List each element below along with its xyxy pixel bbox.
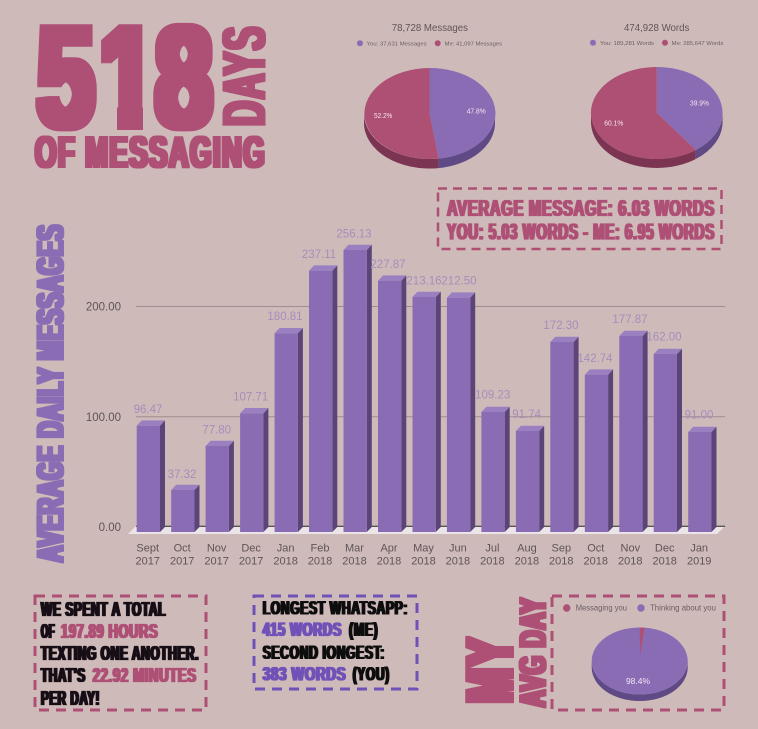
bar: Sept 2017 (137, 420, 165, 532)
callout: total hours texting: PER DAY! (41, 688, 100, 710)
bar chart: average daily messages per month (86, 228, 725, 568)
month axis labels: 2017 (239, 556, 263, 568)
pie chart: words: Me: 285,647 Words (672, 41, 724, 47)
callout: total hours texting: 197.89 HOURS (61, 621, 158, 643)
month axis labels: 2018 (273, 556, 298, 568)
title: 518 days of messaging: OF MESSAGING (35, 128, 266, 177)
bar: Jun 2018 (447, 292, 475, 532)
month axis labels: Feb (311, 542, 329, 554)
title: 518 days of messaging (34, 22, 266, 168)
month axis labels: 2018 (618, 556, 643, 568)
bar value labels: 162.00 (646, 332, 682, 344)
panel: my average day pie chart (552, 596, 724, 710)
month axis labels: 2018 (584, 556, 608, 568)
month axis labels: 2018 (480, 556, 505, 568)
bar value labels: 213.16 (406, 276, 442, 288)
callout: total hours texting: THAT'S (41, 665, 86, 687)
callout: total hours texting: TEXTING ONE ANOTHER. (41, 643, 199, 665)
bar value labels: 91.74 (512, 409, 542, 421)
bar value labels: 37.32 (168, 469, 196, 481)
callout: longest whatsapp: 383 WORDS (263, 665, 346, 686)
bar value labels: 227.87 (370, 259, 406, 271)
month axis labels: Nov (621, 542, 641, 554)
month axis labels: Oct (587, 542, 604, 554)
month axis labels (135, 542, 711, 568)
month axis labels: 2019 (687, 556, 711, 568)
callout: average message length (438, 188, 722, 249)
bar value labels: 91.00 (685, 410, 713, 422)
bar value labels: 172.30 (543, 320, 579, 332)
month axis labels: Aug (517, 542, 537, 554)
bar: Jan 2019 (688, 427, 716, 532)
month axis labels: 2018 (308, 556, 332, 568)
callout: total hours texting: WE SPENT A TOTAL (41, 599, 166, 621)
panel: my average day pie chart: Thinking about you (650, 604, 716, 613)
bar: Apr 2018 (378, 275, 406, 532)
pie chart: messages: 52.2% (374, 113, 392, 120)
month axis labels: 2017 (135, 556, 160, 568)
callout: total hours texting: OF (41, 621, 55, 643)
callout: longest whatsapp: SECOND IONGEST: (263, 643, 385, 664)
bar: Mar 2018 (344, 245, 372, 532)
month axis labels: 2018 (377, 556, 401, 568)
bar: Nov 2018 (619, 331, 648, 532)
bar: Oct 2018 (585, 369, 613, 532)
month axis labels: 2018 (342, 556, 367, 568)
month axis labels: Nov (207, 542, 227, 554)
bar: May 2018 (412, 292, 441, 532)
month axis labels: Sep (552, 542, 571, 554)
heading: my avg day: MY (453, 636, 526, 703)
month axis labels: Sept (136, 542, 159, 554)
pie chart: words: You: 189,281 Words (600, 41, 654, 47)
bar value labels: 256.13 (336, 228, 372, 240)
month axis labels: 2017 (170, 556, 194, 568)
bar: Jan 2018 (275, 328, 303, 532)
callout: longest whatsapp: LONGEST WHATSAPP: (263, 598, 408, 619)
pie chart: words: 474,928 Words (624, 22, 689, 34)
bar value labels: 180.81 (267, 311, 303, 323)
bar: Dec 2018 (654, 349, 682, 532)
callout: longest whatsapp: (YOU) (353, 665, 390, 686)
pie chart: messages (357, 22, 502, 169)
callout: longest whatsapp: (ME) (349, 620, 378, 641)
month axis labels: Oct (174, 542, 191, 554)
pie chart: words: 39.9% (690, 101, 709, 108)
callout: longest whatsapp: 415 WORDS (263, 620, 342, 641)
callout: total hours texting (35, 596, 206, 710)
month axis labels: Mar (345, 542, 364, 554)
month axis labels: May (413, 542, 434, 554)
panel: my average day pie chart: Messaging you (576, 604, 627, 613)
month axis labels: Apr (380, 542, 398, 554)
bar: Oct 2017 (171, 485, 200, 532)
month axis labels: 2018 (652, 556, 677, 568)
bar chart: average daily messages per month: 0.00 (99, 522, 121, 534)
month axis labels: Dec (655, 542, 675, 554)
bar value labels: 77.80 (202, 425, 231, 437)
title: 518 days of messaging: 1 (99, 0, 157, 157)
panel: my average day pie chart: 98.4% (626, 676, 650, 686)
pie chart: words (590, 22, 724, 168)
month axis labels: 2018 (411, 556, 436, 568)
month axis labels: Dec (241, 542, 261, 554)
bar: Jul 2018 (481, 407, 510, 532)
month axis labels: 2018 (515, 556, 539, 568)
bar value labels: 109.23 (475, 390, 510, 402)
month axis labels: 2018 (446, 556, 470, 568)
month axis labels: Jul (485, 542, 499, 554)
pie chart: messages: Me: 41,097 Messages (445, 42, 502, 48)
bar value labels: 177.87 (612, 314, 648, 326)
heading: my avg day: AVG DAY (512, 597, 554, 707)
month axis labels: Jan (690, 542, 708, 554)
pie chart: words: 60.1% (604, 120, 623, 127)
month axis labels: 2017 (204, 556, 229, 568)
title: 518 days of messaging: 5 (37, 0, 95, 157)
bar: Aug 2018 (516, 426, 544, 532)
title: 518 days of messaging: 8 (155, 0, 213, 157)
bar chart: average daily messages per month: 200.00 (86, 302, 121, 314)
bar: Sep 2018 (550, 337, 579, 532)
callout: total hours texting: 22.92 MINUTES (93, 665, 197, 687)
pie chart: messages: 78,728 Messages (392, 22, 468, 34)
pie chart: messages: 47.8% (467, 108, 486, 115)
bar value labels: 212.50 (441, 276, 477, 288)
heading: average daily messages: AVERAGE DAILY MESSAGES (30, 224, 71, 562)
bar value labels: 142.74 (577, 353, 613, 365)
bar: Dec 2017 (240, 408, 268, 532)
callout: longest whatsapp (254, 596, 417, 689)
month axis labels: Jun (449, 542, 467, 554)
bar chart: average daily messages per month: 100.00 (86, 412, 121, 424)
bar value labels: 237.11 (302, 249, 336, 261)
month axis labels: Jan (277, 542, 294, 554)
month axis labels: 2018 (549, 556, 574, 568)
bar: Feb 2018 (309, 265, 337, 532)
heading: my avg day (453, 597, 554, 707)
pie chart: messages: You: 37,631 Messages (367, 42, 427, 48)
bar value labels: 107.71 (233, 392, 268, 404)
bar: Nov 2017 (206, 441, 234, 532)
bar value labels: 96.47 (134, 404, 162, 416)
bar value labels (134, 228, 713, 481)
